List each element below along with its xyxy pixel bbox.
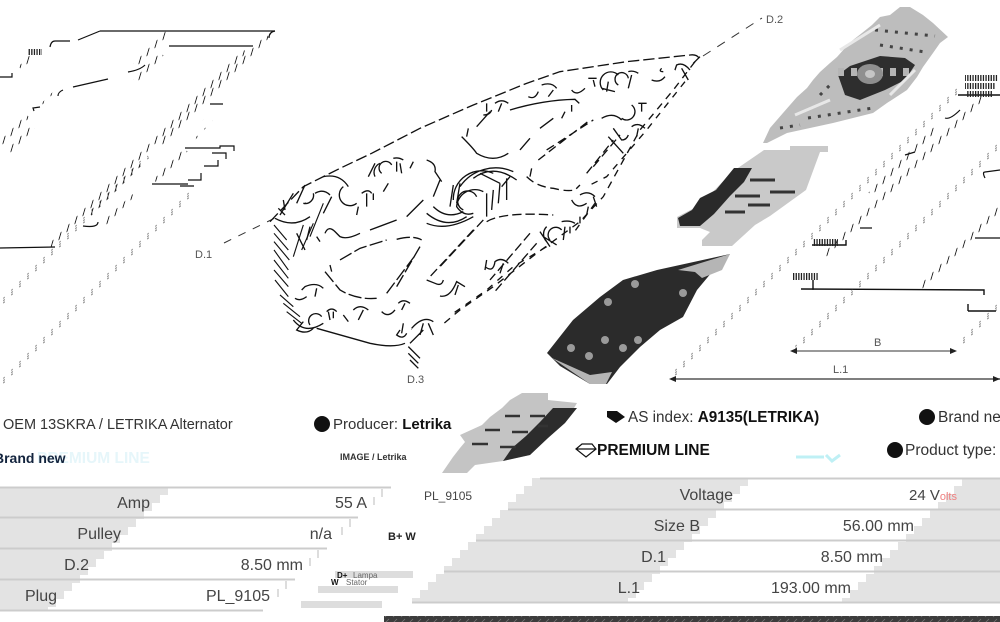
photo: alternator side (677, 146, 828, 246)
dimension: L.1: L.1 (833, 364, 848, 376)
producer line: Producer: Letrika (333, 416, 452, 433)
dimension line: D.1 leader (224, 218, 275, 243)
window one (462, 99, 579, 158)
left edge hatch (274, 203, 323, 323)
row rules (0, 488, 391, 610)
small label: maker: IMAGE / Letrika (340, 452, 408, 462)
value: size B: 56.00 mm (843, 518, 914, 535)
dimension: B: B (874, 337, 881, 349)
row: plug: Plug (25, 588, 57, 605)
value: pulley: n/a (310, 526, 332, 543)
photo: alternator rear (547, 254, 730, 384)
table: left specifications (0, 487, 391, 611)
spiral centre (857, 64, 883, 84)
grey label column (0, 487, 168, 611)
bolt hole arcs mid right (572, 103, 647, 223)
technical drawing: left alternator side view (0, 31, 275, 384)
grey right column (842, 478, 1000, 602)
dimension line: D.2 leader (703, 18, 762, 56)
block details (472, 416, 548, 447)
condition badge left: PREMIUM LINE (37, 450, 150, 467)
row: size B: Size B (654, 518, 700, 535)
bolt hole arcs (275, 176, 388, 250)
grey label column (412, 478, 748, 602)
table: right specifications (412, 478, 1000, 602)
value: amp: 55 A (335, 495, 367, 512)
technical drawing: right alternator side view (672, 75, 1000, 376)
value: D.1: 8.50 mm (821, 549, 883, 566)
second right edge hatch (453, 82, 685, 313)
right border steps (278, 489, 382, 597)
housing teeth (780, 30, 935, 128)
window two (527, 120, 620, 191)
value: L.1: 193.00 mm (771, 580, 851, 597)
large centre swirl (427, 168, 517, 226)
swirl: top right (600, 71, 638, 92)
icon: diamond (576, 444, 596, 457)
pin legend: W (331, 578, 339, 587)
label: D.1: D.1 (195, 249, 212, 261)
row: pulley: Pulley (77, 526, 121, 543)
value: D.2: 8.50 mm (241, 557, 303, 574)
rear terminals (567, 280, 687, 360)
technical drawing: alternator front view (270, 55, 700, 368)
dimension: L.1 (669, 364, 1000, 382)
dark side of block (503, 408, 577, 461)
footer bar (384, 616, 1000, 622)
row: amp: Amp (117, 495, 150, 512)
row: L.1: L.1 (618, 580, 640, 597)
icon: info badge (887, 442, 903, 458)
bottom edge (317, 328, 405, 346)
casing details (725, 180, 795, 212)
checked rotor band (838, 68, 915, 76)
pin legend (301, 571, 413, 608)
heading: product name: OEM 13SKRA / LETRIKA Alternator (3, 417, 233, 433)
housing highlights (795, 25, 915, 115)
outline of housing (270, 55, 699, 222)
plug reference: PL_9105 (424, 489, 472, 503)
value: voltage: 24 Volts (909, 487, 957, 504)
product type line: Product type: (905, 442, 996, 459)
plug pins: B+ W (388, 531, 416, 543)
AS index line: AS index: A9135(LETRIKA) (628, 409, 819, 426)
bolt hole arcs bottom (295, 260, 508, 337)
row: D.2: D.2 (64, 557, 89, 574)
window four (430, 214, 553, 293)
faint cyan mark (796, 455, 840, 461)
swirl: right lower (540, 221, 575, 247)
centre pin dots and leader to D.3 (305, 70, 675, 368)
photo: alternator terminal block (442, 393, 577, 473)
photo: alternator front (763, 7, 948, 143)
row: D.1: D.1 (641, 549, 666, 566)
row: voltage: Voltage (680, 487, 733, 504)
icon: producer badge (314, 416, 330, 432)
right edge hatch (440, 62, 695, 327)
dark casing (678, 168, 752, 226)
window five (317, 160, 442, 242)
pin legend: D+ (337, 571, 348, 580)
row rules (412, 478, 1000, 602)
bolt hole arcs top row (483, 57, 700, 115)
spiral core (865, 70, 875, 78)
value: plug: PL_9105 (206, 588, 270, 605)
dark rotor swirl (838, 56, 915, 100)
pin legend: Lampa (353, 571, 378, 580)
swirl: upper left (368, 158, 403, 177)
rear edges light (552, 254, 730, 384)
icon: tag (607, 411, 625, 423)
premium line right: PREMIUM LINE (597, 442, 710, 459)
dimension: B (790, 337, 957, 354)
pin legend: Stator (346, 578, 368, 587)
swirl: lower left (293, 309, 337, 332)
icon: check badge (919, 409, 935, 425)
window three (325, 237, 422, 299)
label: D.2: D.2 (766, 14, 783, 26)
label: D.3: D.3 (407, 374, 424, 386)
